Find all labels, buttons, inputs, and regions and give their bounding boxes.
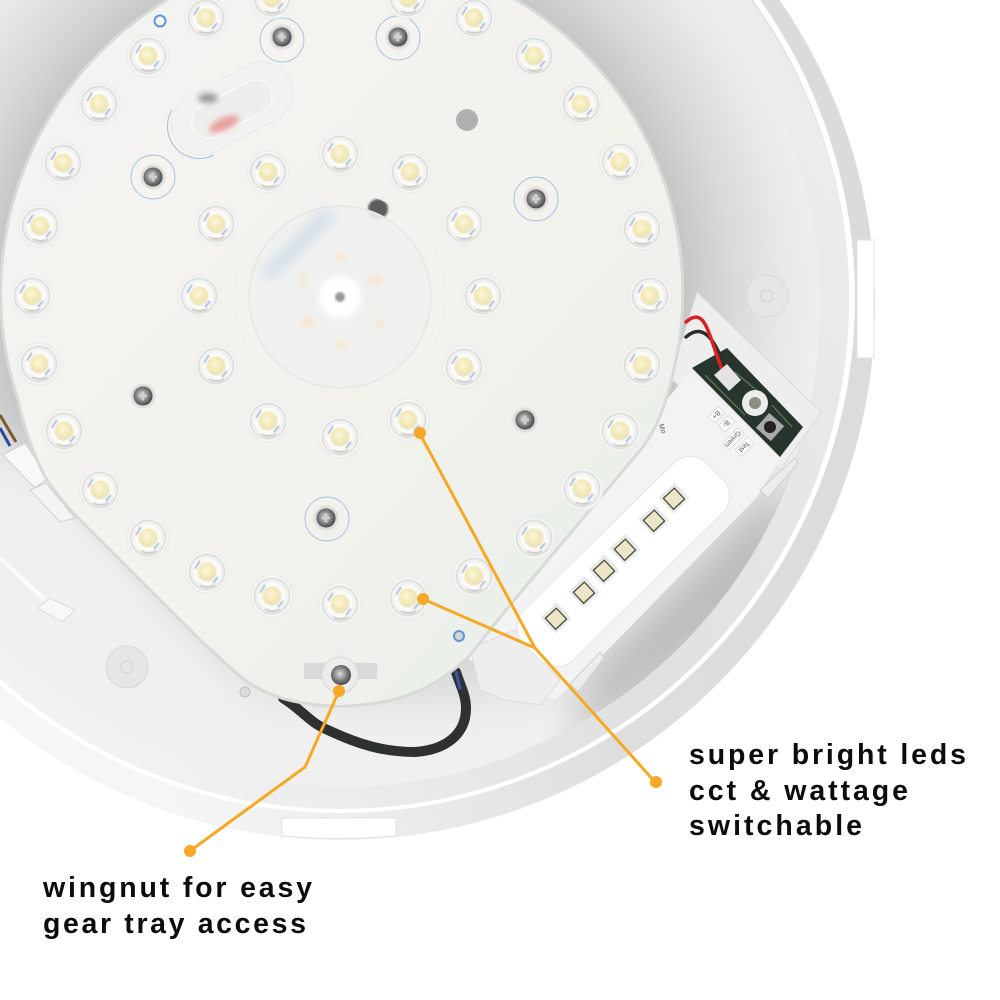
lower floor lightening	[0, 436, 790, 772]
callout text: leds: super bright leds	[689, 739, 966, 771]
tray base block	[470, 630, 560, 705]
wire connector	[3, 443, 48, 488]
callout text: wingnut	[42, 872, 312, 940]
pcb traces	[705, 372, 792, 427]
wingnut	[304, 643, 377, 705]
callout line: wingnut	[184, 685, 345, 857]
label: B+: B+	[710, 409, 721, 420]
module leds	[545, 488, 685, 629]
tray top lip	[670, 292, 821, 470]
board screw holes	[368, 109, 478, 219]
test button	[756, 413, 784, 441]
label: Green: Green	[723, 429, 742, 448]
screw rings	[131, 16, 558, 541]
board clip	[30, 483, 75, 522]
emergency led module	[507, 447, 740, 677]
led board	[1, 0, 683, 706]
model text: Mo	[657, 423, 667, 435]
shadow under battery tray	[570, 470, 790, 750]
label: B-: B-	[720, 418, 731, 429]
connector	[714, 364, 741, 391]
tray side clips	[570, 458, 798, 692]
callout line: leds	[414, 427, 662, 788]
label: Test: Test	[737, 439, 751, 453]
module led recesses	[540, 482, 690, 634]
small blue rings	[154, 16, 464, 641]
black cable	[283, 672, 466, 752]
callout text: wingnut: gear tray access	[43, 908, 306, 940]
callout text: leds: cct & wattage	[689, 775, 908, 807]
central dome	[234, 191, 446, 403]
luminaire housing	[0, 0, 875, 880]
inner led ring	[178, 133, 504, 458]
status led on pcb	[742, 390, 768, 416]
outer led ring	[11, 0, 671, 625]
white highlight stripe	[0, 0, 852, 810]
screws	[131, 25, 548, 530]
callout dots: leds	[414, 427, 662, 788]
tray labels	[709, 406, 754, 456]
housing floor	[0, 0, 820, 785]
mounting boss left	[106, 646, 148, 688]
tray white body	[465, 372, 780, 700]
callout text: leds: switchable	[689, 810, 862, 842]
blurred capsule component	[161, 51, 304, 166]
wires left	[0, 415, 75, 522]
connector wires	[686, 317, 727, 375]
housing inner band	[0, 0, 849, 809]
white clip lower left	[0, 558, 75, 622]
small rivet	[240, 687, 250, 697]
circuit board	[692, 348, 803, 457]
mounting boss right	[746, 275, 788, 317]
housing tab: right	[857, 240, 874, 358]
housing tab: bottom	[282, 818, 396, 838]
callout text: leds	[689, 739, 966, 842]
callout text: wingnut: wingnut for easy	[42, 872, 312, 904]
housing outer rim	[0, 0, 875, 840]
battery gear tray	[465, 292, 821, 705]
